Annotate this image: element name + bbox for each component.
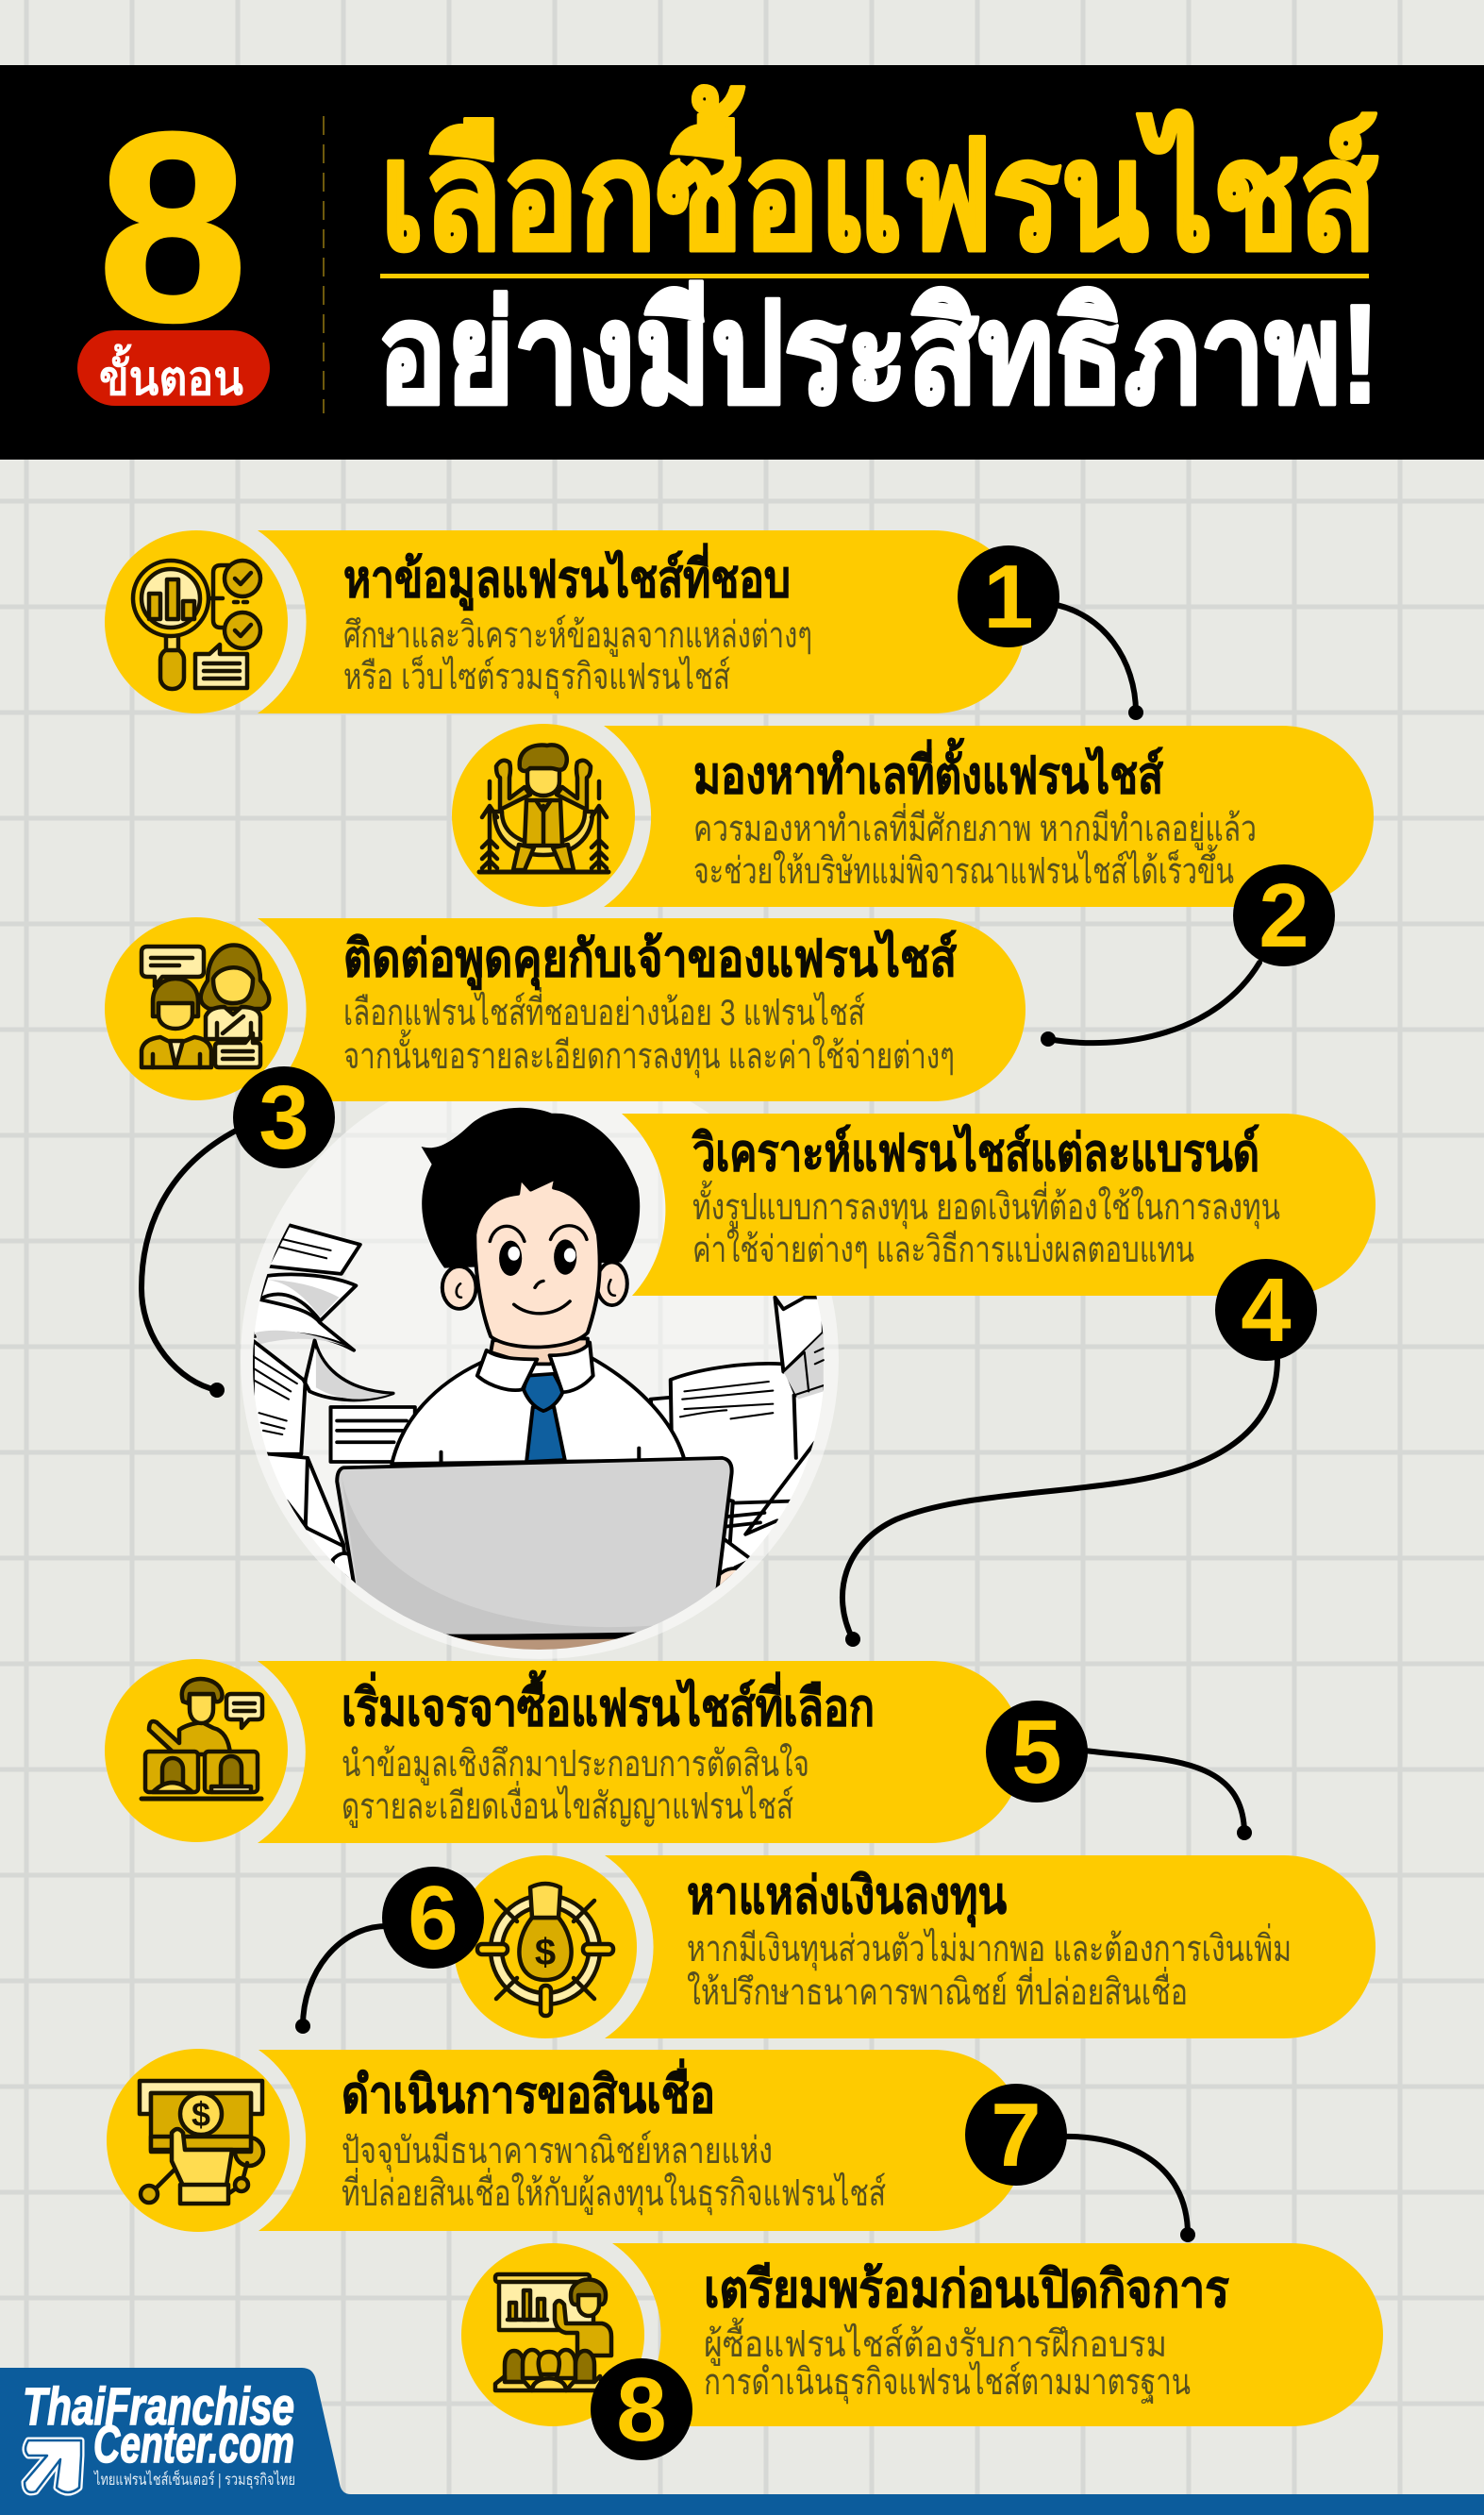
banner bbox=[604, 726, 1374, 907]
heading: หาข้อมูลแฟรนไชส์ที่ชอบ bbox=[343, 543, 791, 611]
heading: เริ่มเจรจาซื้อแฟรนไชส์ที่เลือก bbox=[342, 1670, 875, 1736]
number badge 6 with connector: 6 bbox=[408, 1868, 459, 1969]
description: ดูรายละเอียดเงื่อนไขสัญญาแฟรนไชส์ bbox=[342, 1781, 793, 1828]
icon: money bag in target: $ bbox=[535, 1932, 556, 1973]
red pill: steps: ขั้นตอน bbox=[99, 344, 243, 405]
illustration: businessman at laptop in circle bbox=[241, 1061, 839, 1677]
icon: presenter with two monitors bbox=[142, 1679, 262, 1799]
heading: เตรียมพร้อมก่อนเปิดกิจการ bbox=[704, 2261, 1229, 2318]
description: การดำเนินธุรกิจแฟรนไชส์ตามมาตรฐาน bbox=[704, 2361, 1191, 2405]
footer logo: ThaiFranchiseCenter.com bbox=[0, 2368, 1484, 2515]
panel: step 2 bbox=[452, 724, 1374, 1047]
number badge 2 with connector bbox=[1041, 864, 1335, 1047]
panel: step 4 bbox=[622, 1114, 1376, 1647]
header banner bbox=[0, 65, 1484, 460]
description bbox=[687, 1923, 1292, 2013]
description bbox=[343, 987, 955, 1079]
panel: step 3 bbox=[105, 917, 1025, 1398]
heading: หาแหล่งเงินลงทุน bbox=[687, 1868, 1007, 1928]
footer logo: ThaiFranchiseCenter.com: ไทยแฟรนไชส์เซ็นเตอร์ | รวมธุรกิจไทย bbox=[92, 2469, 295, 2490]
number badge 3 with connector: 3 bbox=[258, 1067, 309, 1168]
banner bbox=[258, 918, 1025, 1101]
number badge 8: 8 bbox=[616, 2359, 667, 2460]
hair bbox=[422, 1108, 640, 1268]
icon: arrow bbox=[25, 2440, 81, 2492]
number badge 5 with connector bbox=[986, 1701, 1252, 1840]
description bbox=[692, 1180, 1280, 1270]
panel: step 5 bbox=[105, 1659, 1252, 1843]
description: ให้ปรึกษาธนาคารพาณิชย์ ที่ปล่อยสินเชื่อ bbox=[687, 1967, 1188, 2013]
banner bbox=[605, 1855, 1376, 2038]
tie bbox=[526, 1407, 565, 1462]
description: นำข้อมูลเชิงลึกมาประกอบการตัดสินใจ bbox=[342, 1743, 809, 1786]
panel: step 8 bbox=[461, 2243, 1383, 2460]
icon: banknote from machine and hand bbox=[140, 2081, 263, 2204]
number badge 7 with connector bbox=[965, 2084, 1195, 2242]
heading: ดำเนินการขอสินเชื่อ bbox=[342, 2058, 715, 2123]
description bbox=[343, 614, 812, 699]
number badge 7 with connector: 7 bbox=[991, 2085, 1042, 2186]
icon: banknote from machine and hand: $ bbox=[192, 2095, 210, 2134]
left paper stack bbox=[253, 1223, 417, 1585]
banner bbox=[612, 2243, 1383, 2426]
description: ปัจจุบันมีธนาคารพาณิชย์หลายแห่ง bbox=[342, 2130, 773, 2173]
number badge 2 with connector: 2 bbox=[1259, 865, 1309, 966]
heading: มองหาทำเลที่ตั้งแฟรนไชส์ bbox=[693, 738, 1163, 804]
right paper stack bbox=[649, 1296, 825, 1589]
description bbox=[704, 2317, 1191, 2405]
description: ที่ปล่อยสินเชื่อให้กับผู้ลงทุนในธุรกิจแฟรนไชส์ bbox=[342, 2168, 886, 2216]
description: เลือกแฟรนไชส์ที่ชอบอย่างน้อย 3 แฟรนไชส์ bbox=[343, 987, 865, 1033]
heading: วิเคราะห์แฟรนไชส์แต่ละแบรนด์ bbox=[692, 1123, 1259, 1182]
icon: presentation board and audience bbox=[495, 2274, 611, 2390]
panel: step 1 bbox=[105, 530, 1143, 720]
face bbox=[475, 1178, 600, 1348]
desk bbox=[446, 1635, 630, 1650]
description bbox=[693, 803, 1257, 892]
banner bbox=[258, 530, 1025, 713]
collar bbox=[477, 1350, 537, 1390]
eyes bbox=[499, 1241, 522, 1276]
big number 8: 8 bbox=[98, 77, 247, 377]
icon: person in target with arrows bbox=[479, 745, 609, 872]
description: ควรมองหาทำเลที่มีศักยภาพ หากมีทำเลอยู่แล้ว bbox=[693, 803, 1257, 850]
laptop bbox=[337, 1458, 732, 1635]
description: ผู้ซื้อแฟรนไชส์ต้องรับการฝึกอบรม bbox=[704, 2317, 1167, 2366]
icon: money bag in target bbox=[477, 1884, 613, 2016]
panel: step 6 bbox=[295, 1855, 1376, 2038]
number badge 8 bbox=[591, 2358, 692, 2460]
description bbox=[342, 1743, 809, 1828]
number badge 4 with connector: 4 bbox=[1241, 1260, 1292, 1361]
footer logo: ThaiFranchiseCenter.com: ThaiFranchise bbox=[23, 2376, 294, 2436]
ears bbox=[442, 1266, 476, 1309]
panel: step 7 bbox=[107, 2049, 1195, 2242]
description: ทั้งรูปแบบการลงทุน ยอดเงินที่ต้องใช้ในการลงทุน bbox=[692, 1180, 1280, 1230]
description: หรือ เว็บไซต์รวมธุรกิจแฟรนไชส์ bbox=[343, 654, 730, 699]
number badge 1 with connector bbox=[958, 545, 1143, 720]
number badge 4 with connector bbox=[842, 1259, 1317, 1647]
heading: ติดต่อพูดคุยกับเจ้าของแฟรนไชส์ bbox=[343, 929, 957, 991]
red pill: steps bbox=[77, 330, 270, 406]
description: จะช่วยให้บริษัทแม่พิจารณาแฟรนไชส์ได้เร็วขึ้น bbox=[693, 844, 1234, 892]
neck bbox=[491, 1338, 588, 1364]
description bbox=[342, 2130, 886, 2216]
shirt bbox=[392, 1358, 685, 1464]
description: หากมีเงินทุนส่วนตัวไม่มากพอ และต้องการเงินเพิ่ม bbox=[687, 1923, 1292, 1971]
banner bbox=[258, 1661, 1023, 1843]
banner bbox=[622, 1114, 1376, 1296]
description: จากนั้นขอรายละเอียดการลงทุน และค่าใช้จ่ายต่างๆ bbox=[343, 1029, 955, 1079]
number badge 1 with connector: 1 bbox=[983, 546, 1034, 647]
number badge 3 with connector bbox=[142, 1066, 335, 1398]
icon: two people talking bbox=[142, 946, 269, 1067]
number badge 5 with connector: 5 bbox=[1011, 1702, 1062, 1802]
number badge 6 with connector bbox=[295, 1867, 484, 2034]
banner bbox=[258, 2050, 1025, 2231]
icon: magnifier with chart and checks bbox=[133, 561, 260, 689]
description: ค่าใช้จ่ายต่างๆ และวิธีการแบ่งผลตอบแทน bbox=[692, 1229, 1194, 1270]
footer logo: ThaiFranchiseCenter.com: Center.com bbox=[93, 2414, 294, 2473]
description: ศึกษาและวิเคราะห์ข้อมูลจากแหล่งต่างๆ bbox=[343, 614, 812, 657]
